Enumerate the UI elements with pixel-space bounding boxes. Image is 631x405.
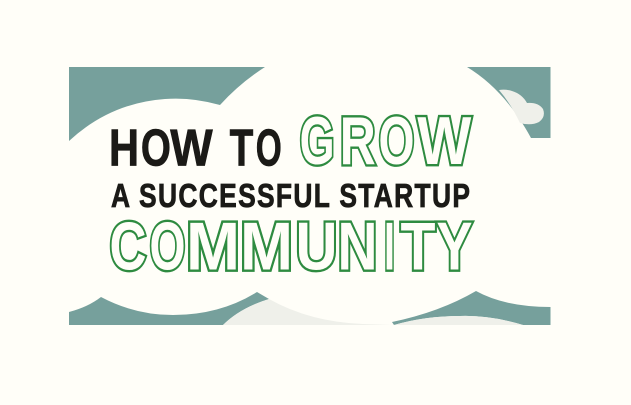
hill: grey left [223, 299, 392, 325]
heading: community: C [110, 210, 146, 284]
heading: community: T [400, 210, 436, 284]
heading: community: M [240, 210, 293, 284]
heading: how to: H [109, 119, 139, 177]
sky: bottom right teal [392, 291, 550, 325]
heading: grow: R [340, 104, 376, 179]
heading: how to: T [230, 119, 253, 177]
heading: grow: O [378, 104, 414, 179]
heading: community: O [150, 210, 186, 284]
heading: grow: G [300, 104, 335, 179]
heading: grow: W [417, 104, 471, 179]
sky: bottom left teal [69, 292, 269, 325]
heading: community: Y [436, 210, 472, 284]
heading: how to: W [170, 119, 213, 177]
sky: top left teal [69, 67, 265, 141]
sky: top right teal [467, 67, 550, 138]
heading: how to: O [141, 119, 171, 177]
heading: community: I [384, 210, 395, 284]
heading: community: M [186, 210, 240, 284]
heading: how to: O [256, 119, 282, 177]
hill: grey right [394, 316, 523, 325]
icon: small grey cloud [499, 90, 544, 124]
heading: community: N [338, 210, 378, 284]
heading: a successful startup: A SUCCESSFUL STARTUP [111, 178, 470, 215]
heading: community: U [296, 210, 338, 284]
